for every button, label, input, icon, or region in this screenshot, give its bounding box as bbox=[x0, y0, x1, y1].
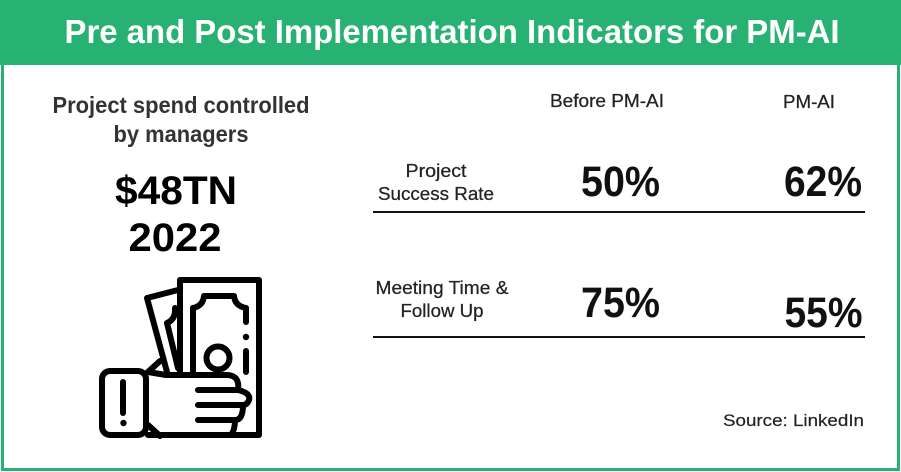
icon part: banknote inner outline bbox=[193, 296, 246, 372]
source note: Source: LinkedIn bbox=[723, 411, 864, 430]
icon part: wrist bbox=[148, 361, 160, 436]
icon part: note dot bbox=[243, 334, 249, 340]
row label: project success rate: Project bbox=[406, 161, 466, 181]
row label: project success rate bbox=[378, 161, 494, 204]
value: 62%: 62% bbox=[784, 158, 862, 206]
icon: hand holding money bbox=[102, 280, 259, 436]
row label: meeting time: Meeting Time & bbox=[376, 278, 508, 298]
icon part: cuff bbox=[102, 371, 146, 435]
row label: project success rate: Success Rate bbox=[378, 184, 494, 204]
value: 55%: 55% bbox=[784, 289, 862, 337]
title banner bbox=[0, 0, 901, 65]
big number: $48TN 2022 bbox=[115, 169, 237, 260]
heading: project spend bbox=[52, 92, 310, 147]
big number: $48TN 2022: $48TN bbox=[115, 169, 237, 213]
heading: project spend: by managers bbox=[114, 121, 248, 147]
heading: project spend: Project spend controlled bbox=[52, 92, 310, 118]
icon part: back note bbox=[147, 290, 178, 372]
column heading: before: Before PM-AI bbox=[550, 91, 664, 111]
value: 50%: 50% bbox=[581, 158, 660, 206]
value: 75%: 75% bbox=[581, 279, 660, 327]
row label: meeting time bbox=[376, 278, 508, 321]
icon part: banknote bbox=[148, 280, 259, 435]
icon part: coin bbox=[206, 346, 230, 370]
title banner: Pre and Post Implementation Indicators for PM-AI bbox=[64, 13, 840, 50]
row label: meeting time: Follow Up bbox=[400, 301, 484, 321]
big number: $48TN 2022: 2022 bbox=[128, 216, 222, 260]
icon part: cuff dot bbox=[120, 420, 127, 426]
icon part: hand bbox=[148, 372, 249, 435]
column heading: PM-AI: PM-AI bbox=[783, 92, 835, 112]
